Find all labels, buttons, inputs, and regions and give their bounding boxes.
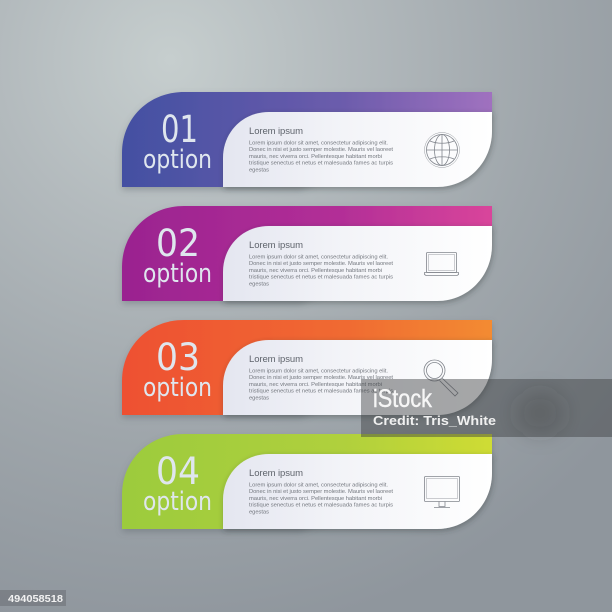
text block 04: Donec in nisi et justo semper molestie. Mauris vel laoreet xyxy=(249,489,393,495)
number 04: 04 xyxy=(156,450,200,493)
label option 03: option xyxy=(143,373,212,403)
text block 03: Donec in nisi et justo semper molestie. Mauris vel laoreet xyxy=(249,375,393,381)
text block 02: tristique senectus et netus et malesuada fames ac turpis xyxy=(249,274,393,280)
text block 03: Lorem ipsum xyxy=(249,354,303,365)
number 01: 01 xyxy=(161,108,198,151)
image id badge xyxy=(0,590,66,606)
label option 04: option xyxy=(143,487,212,517)
text block 01: Donec in nisi et justo semper molestie. Mauris vel laoreet xyxy=(249,147,393,153)
text block 02 xyxy=(249,240,393,288)
text block 03 xyxy=(249,354,393,402)
icon: magnifier xyxy=(424,360,458,396)
colored tab 04 xyxy=(122,434,492,529)
text block 03: egestas xyxy=(249,396,269,402)
text block 03: mauris, nec viverra orci. Pellentesque habitant morbi xyxy=(249,382,382,388)
text block 02: Donec in nisi et justo semper molestie. Mauris vel laoreet xyxy=(249,261,393,267)
watermark: iStock credit xyxy=(361,379,612,437)
white card 04 xyxy=(223,454,492,529)
text block 01: mauris, nec viverra orci. Pellentesque habitant morbi xyxy=(249,154,382,160)
label option 01: option xyxy=(143,145,212,175)
text block 01: tristique senectus et netus et malesuada fames ac turpis xyxy=(249,160,393,166)
text block 03: tristique senectus et netus et malesuada fames ac turpis xyxy=(249,388,393,394)
colored tab 03 xyxy=(122,320,492,415)
text block 01: Lorem ipsum dolor sit amet, consectetur adipiscing elit. xyxy=(249,140,388,146)
white card 01 xyxy=(223,112,492,187)
text block 04 xyxy=(249,468,393,516)
text block 02: egestas xyxy=(249,282,269,288)
label option 02: option xyxy=(143,259,212,289)
text block 03: Lorem ipsum dolor sit amet, consectetur adipiscing elit. xyxy=(249,368,388,374)
number 02: 02 xyxy=(156,222,200,265)
text block 04: mauris, nec viverra orci. Pellentesque habitant morbi xyxy=(249,496,382,502)
panel: option 02 xyxy=(122,206,492,301)
image id badge: 494058518 xyxy=(8,593,63,605)
watermark: iStock credit: Credit: Tris_White xyxy=(373,413,496,428)
text block 01 xyxy=(249,126,393,174)
text block 01: Lorem ipsum xyxy=(249,126,303,137)
colored tab 01 xyxy=(122,92,492,187)
white card 03 xyxy=(223,340,492,415)
watermark: iStock credit: iStock xyxy=(373,385,432,413)
colored tab 02 xyxy=(122,206,492,301)
text block 04: Lorem ipsum xyxy=(249,468,303,479)
panel: option 03 xyxy=(122,320,492,415)
text block 04: Lorem ipsum dolor sit amet, consectetur adipiscing elit. xyxy=(249,482,388,488)
text block 02: mauris, nec viverra orci. Pellentesque habitant morbi xyxy=(249,268,382,274)
text block 02: Lorem ipsum xyxy=(249,240,303,251)
white card 02 xyxy=(223,226,492,301)
icon: globe xyxy=(424,132,460,168)
text block 04: tristique senectus et netus et malesuada fames ac turpis xyxy=(249,502,393,508)
text block 04: egestas xyxy=(249,510,269,516)
panel: option 01 xyxy=(122,92,492,187)
text block 01: egestas xyxy=(249,168,269,174)
text block 02: Lorem ipsum dolor sit amet, consectetur adipiscing elit. xyxy=(249,254,388,260)
number 03: 03 xyxy=(156,336,200,379)
icon: monitor xyxy=(424,476,460,508)
panel: option 04 xyxy=(122,434,492,529)
icon: laptop xyxy=(424,252,458,276)
